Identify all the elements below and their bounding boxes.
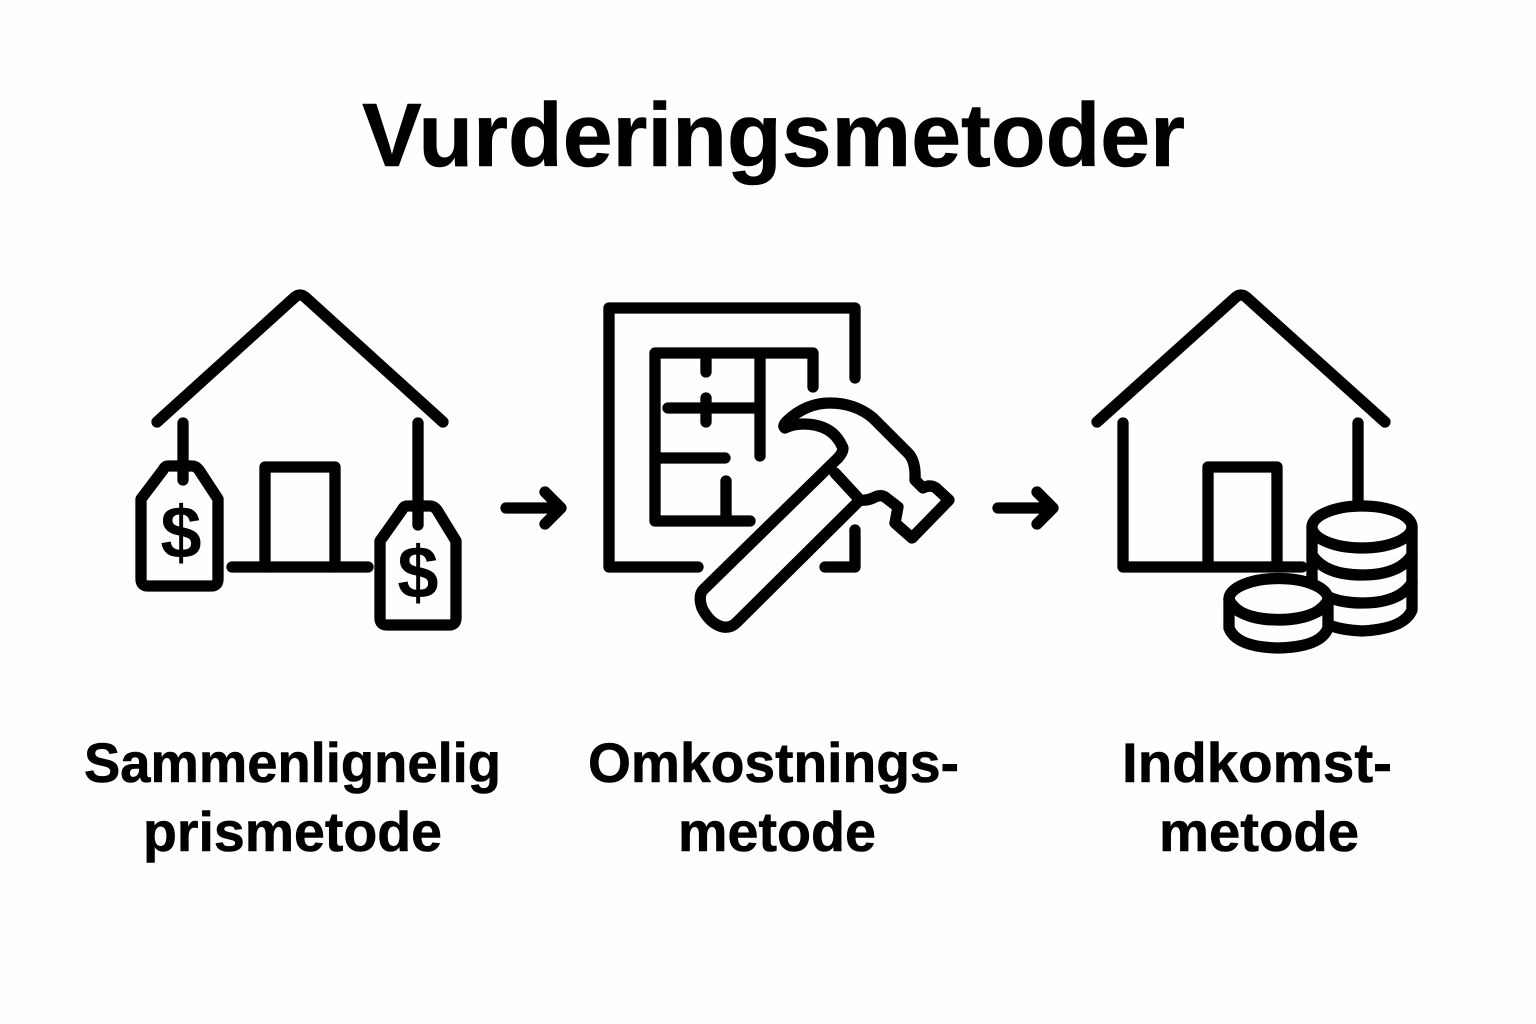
right price tag — [380, 423, 456, 625]
label: cost method: Omkostnings- — [588, 731, 959, 794]
roof — [1097, 295, 1385, 422]
label: comparable price method: Sammenlignelig — [84, 731, 501, 794]
title: Vurderingsmetoder — [362, 86, 1185, 186]
large coin stack — [1312, 506, 1412, 631]
icon: house with coin stacks — [1097, 295, 1412, 648]
door — [1208, 467, 1277, 567]
label: comparable price method: prismetode — [143, 800, 442, 863]
left price tag — [141, 423, 218, 586]
left price tag: $ — [160, 491, 202, 574]
small coin stack — [1229, 578, 1328, 648]
label: comparable price method — [84, 731, 501, 863]
door — [265, 467, 335, 567]
right price tag: $ — [397, 531, 439, 614]
arrow: first to second method — [506, 492, 561, 524]
outer plan frame — [609, 308, 855, 567]
hammer — [700, 403, 949, 627]
label: income method — [1122, 731, 1392, 863]
icon: house with price tags — [141, 295, 456, 625]
label: income method: metode — [1159, 800, 1359, 863]
house walls and floor — [1123, 423, 1358, 567]
floor plan walls — [655, 353, 813, 521]
label: income method: Indkomst- — [1122, 731, 1392, 794]
hammer handle — [700, 458, 860, 627]
hammer head — [784, 403, 949, 538]
arrow: second to third method — [998, 492, 1053, 524]
icon: floor plan with hammer — [609, 308, 949, 627]
label: cost method — [588, 731, 959, 863]
house floor line — [232, 561, 368, 573]
roof — [157, 295, 443, 422]
label: cost method: metode — [678, 800, 876, 863]
